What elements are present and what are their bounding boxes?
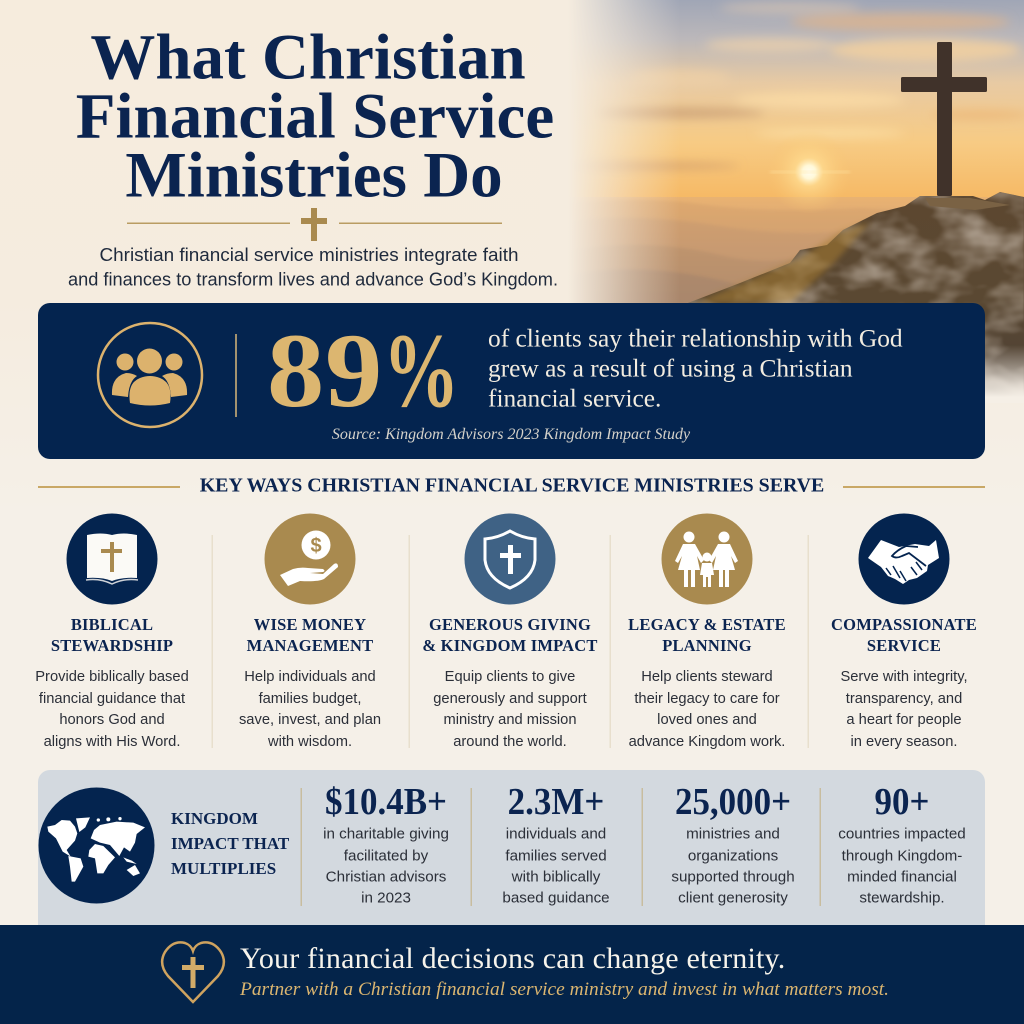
heading: WISE MONEY	[254, 615, 366, 634]
statistic description	[488, 324, 903, 412]
icon: handshake	[858, 514, 950, 604]
description: Serve with integrity,	[840, 669, 968, 685]
column dividers	[212, 535, 809, 748]
big number 89%: %	[383, 312, 459, 429]
icon: open bible	[66, 514, 158, 604]
description: generously and support	[433, 691, 587, 707]
stat: individuals served: individuals and	[506, 826, 606, 842]
big number 89%: 8	[267, 312, 324, 429]
intro text: Christian financial service ministries integrate faith	[100, 245, 518, 266]
source note: Source: Kingdom Advisors 2023 Kingdom Impact Study	[332, 426, 690, 443]
dividers	[300, 788, 821, 906]
divider	[235, 334, 236, 417]
title divider with cross	[127, 208, 502, 241]
stat: individuals served: families served	[505, 848, 607, 864]
background photo: sunset with cross on hill	[576, 0, 1024, 394]
heading: BIBLICAL	[71, 615, 153, 634]
description: a heart for people	[846, 712, 962, 728]
label: MULTIPLIES	[171, 859, 276, 878]
big number 89%: 9	[325, 312, 382, 429]
panel: legacy and estate planning	[628, 514, 786, 750]
stat: individuals served: based guidance	[502, 890, 610, 906]
description: Help individuals and	[244, 669, 376, 685]
panel: wise money management	[239, 514, 381, 750]
description: loved ones and	[657, 712, 757, 728]
icon: shield with cross	[464, 514, 556, 604]
panel: compassionate service	[831, 514, 977, 750]
description: financial guidance that	[39, 691, 185, 707]
call to action subline: Partner with a Christian financial service ministry and invest in what matters most.	[240, 979, 889, 1000]
panel: 89% statistic	[38, 303, 985, 459]
icon: hand with coin: $	[310, 535, 322, 557]
description: their legacy to care for	[634, 691, 780, 707]
section heading: KEY WAYS CHRISTIAN FINANCIAL SERVICE MINISTRIES SERVE	[200, 474, 824, 496]
description: transparency, and	[846, 691, 962, 707]
heading: COMPASSIONATE	[831, 615, 977, 634]
description: aligns with His Word.	[44, 734, 180, 750]
stat: individuals served: 2.3M+	[508, 781, 604, 823]
stat: countries impacted: through Kingdom-	[842, 848, 962, 864]
icon: world map globe	[38, 788, 154, 904]
description: honors God and	[59, 712, 165, 728]
stat: countries impacted: stewardship.	[859, 890, 945, 906]
stat: countries impacted	[838, 781, 966, 906]
description: advance Kingdom work.	[629, 734, 785, 750]
label: KINGDOM	[171, 809, 258, 828]
description: families budget,	[259, 691, 361, 707]
icon: heart with cross	[160, 941, 226, 1004]
description: with wisdom.	[268, 734, 352, 750]
stat: ministries supported: client generosity	[678, 890, 788, 906]
description: around the world.	[453, 734, 567, 750]
stat: countries impacted: minded financial	[847, 868, 957, 886]
description: Provide biblically based	[35, 669, 189, 685]
stat: ministries supported: 25,000+	[675, 781, 791, 823]
panel: generous giving: & KINGDOM IMPACT	[422, 636, 598, 655]
icon: people in circle	[96, 322, 204, 428]
stat: charitable giving: in charitable giving	[323, 826, 449, 842]
stat: individuals served: with biblically	[512, 868, 600, 886]
panel: legacy and estate planning: PLANNING	[662, 636, 752, 655]
description	[35, 669, 189, 750]
stat: charitable giving	[323, 781, 449, 906]
heading: LEGACY & ESTATE	[628, 615, 786, 634]
statistic description: financial service.	[488, 384, 661, 412]
description: ministry and mission	[443, 712, 577, 728]
icon: family	[662, 514, 752, 604]
stat: ministries supported: supported through	[671, 868, 795, 886]
call to action headline: Your financial decisions can change eternity.	[240, 942, 786, 975]
stat: ministries supported: organizations	[688, 848, 778, 864]
statistic description: of clients say their relationship with God	[488, 324, 903, 352]
stat: individuals served	[502, 781, 610, 906]
description	[840, 669, 968, 750]
label	[171, 809, 289, 878]
title: Ministries Do	[125, 140, 503, 212]
description: in every season.	[851, 734, 957, 750]
intro text: and finances to transform lives and advance God’s Kingdom.	[68, 270, 558, 290]
stat: ministries supported	[671, 781, 795, 906]
panel: biblical stewardship: STEWARDSHIP	[51, 636, 173, 655]
stat: countries impacted: countries impacted	[838, 826, 966, 842]
description	[629, 669, 785, 750]
stat: charitable giving: $10.4B+	[325, 781, 447, 823]
panel: wise money management: MANAGEMENT	[247, 636, 373, 655]
stat: charitable giving: Christian advisors	[326, 868, 446, 886]
heading: GENEROUS GIVING	[429, 615, 591, 634]
panel: biblical stewardship	[35, 514, 189, 750]
cross	[901, 42, 987, 196]
intro text	[68, 245, 558, 290]
statistic description: grew as a result of using a Christian	[488, 354, 853, 382]
stat: charitable giving: facilitated by	[344, 848, 428, 864]
description	[433, 669, 587, 750]
description: save, invest, and plan	[239, 712, 381, 728]
panel: kingdom impact stats	[38, 770, 985, 940]
description: Help clients steward	[641, 669, 773, 685]
big number 89%	[267, 312, 459, 429]
label: IMPACT THAT	[171, 834, 289, 853]
description	[239, 669, 381, 750]
panel: generous giving	[422, 514, 598, 750]
description: Equip clients to give	[445, 669, 575, 685]
title: Financial Service	[76, 80, 554, 152]
footer banner	[0, 925, 1024, 1024]
hill	[688, 192, 1024, 400]
icon: hand with coin	[264, 514, 356, 604]
stat: ministries supported: ministries and	[686, 826, 780, 842]
title: What Christian	[90, 22, 526, 94]
stat: countries impacted: 90+	[875, 781, 929, 823]
title	[76, 22, 554, 212]
stat: charitable giving: in 2023	[361, 890, 411, 906]
panel: compassionate service: SERVICE	[867, 636, 941, 655]
